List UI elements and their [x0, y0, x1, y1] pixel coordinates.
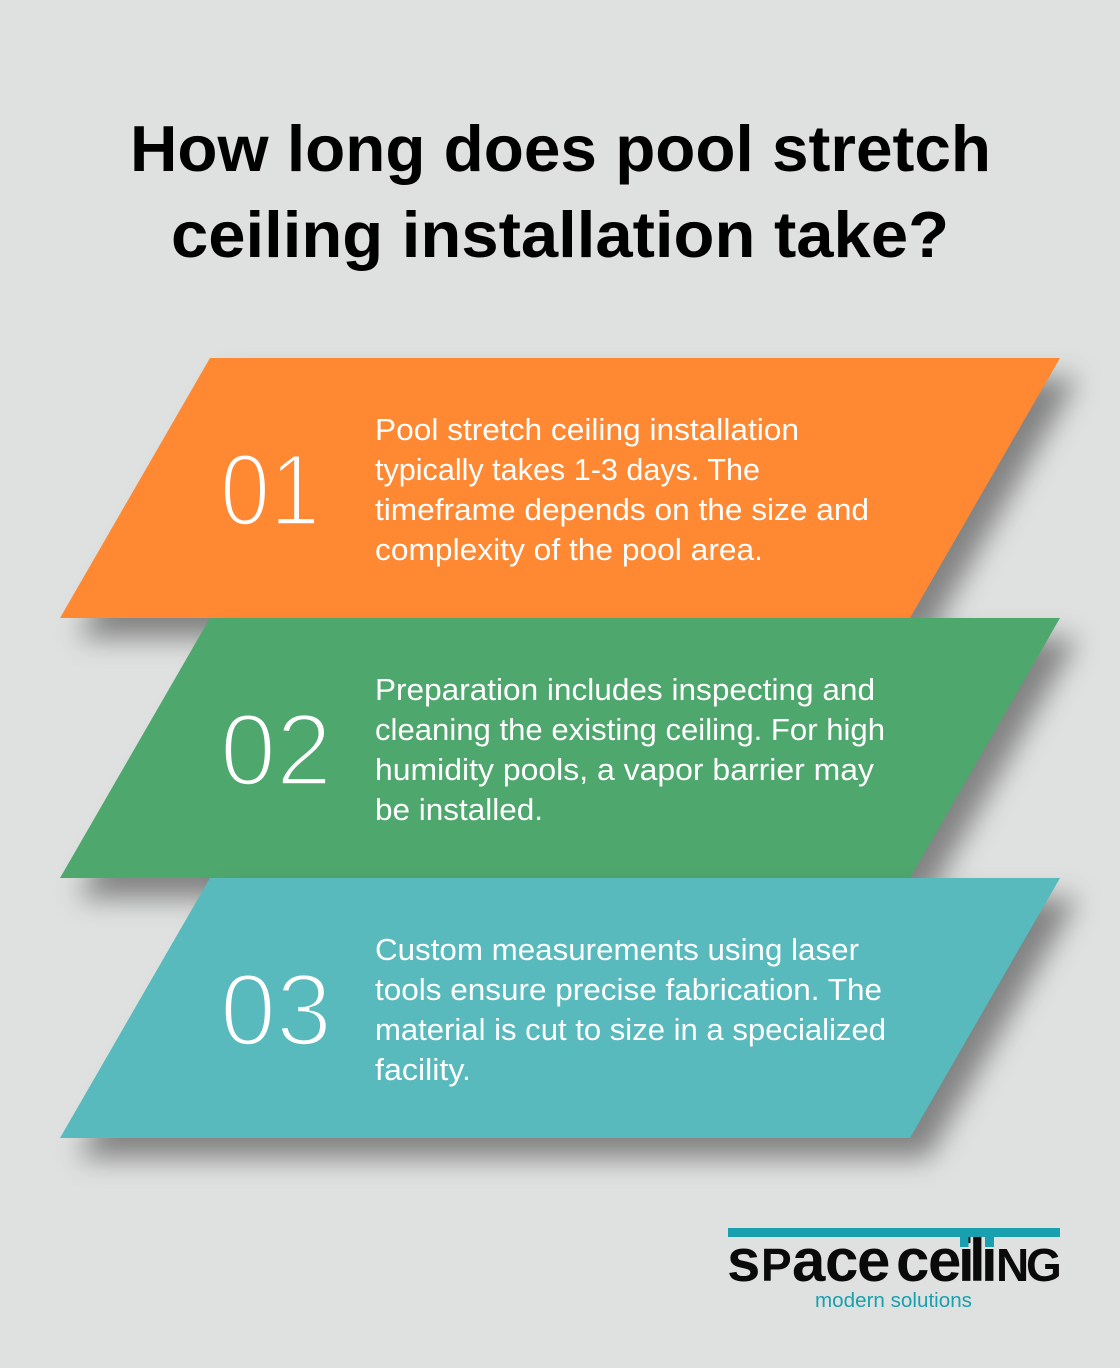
title: [130, 112, 991, 271]
text block: step 03: tools ensure precise fabrication. The: [375, 973, 882, 1007]
text block: step 01: timeframe depends on the size and: [375, 493, 869, 527]
logo wordmark: c: [825, 1227, 858, 1294]
text block: step 01: complexity of the pool area.: [375, 533, 763, 567]
panel: step 01: [60, 358, 1078, 638]
logo wordmark: e: [928, 1227, 961, 1294]
text block: step 03: Custom measurements using laser: [375, 933, 859, 967]
number 02: 02: [220, 693, 332, 807]
title: ceiling installation take?: [171, 198, 949, 271]
title: How long does pool stretch: [130, 112, 991, 185]
text block: step 02: Preparation includes inspecting and: [375, 673, 875, 707]
logo wordmark: a: [792, 1227, 826, 1294]
logo wordmark: s: [727, 1227, 760, 1294]
panel: step 03: [60, 878, 1078, 1158]
text block: step 01: Pool stretch ceiling installation: [375, 413, 799, 447]
text block: step 01: [375, 413, 869, 567]
logo wordmark: e: [857, 1227, 890, 1294]
logo wordmark: g: [1026, 1221, 1062, 1295]
logo: Space Ceiling: [727, 1221, 1062, 1312]
logo wordmark: p: [761, 1221, 792, 1295]
panel: step 02: [60, 618, 1078, 898]
text block: step 02: cleaning the existing ceiling. For high: [375, 713, 885, 747]
number 03: 03: [220, 953, 332, 1067]
text block: step 01: typically takes 1-3 days. The: [375, 453, 760, 487]
number 01: 01: [220, 433, 320, 547]
logo wordmark: n: [996, 1221, 1029, 1295]
logo wordmark: c: [896, 1227, 929, 1294]
text block: step 02: humidity pools, a vapor barrier may: [375, 753, 875, 787]
logo wordmark: i: [981, 1227, 998, 1294]
text block: step 02: be installed.: [375, 793, 543, 827]
text block: step 03: facility.: [375, 1053, 471, 1087]
logo tagline: modern solutions: [815, 1290, 972, 1312]
logo wordmark: l: [969, 1227, 986, 1294]
text block: step 03: [375, 933, 886, 1087]
logo wordmark: i: [958, 1227, 975, 1294]
text block: step 03: material is cut to size in a specialized: [375, 1013, 886, 1047]
text block: step 02: [375, 673, 885, 827]
